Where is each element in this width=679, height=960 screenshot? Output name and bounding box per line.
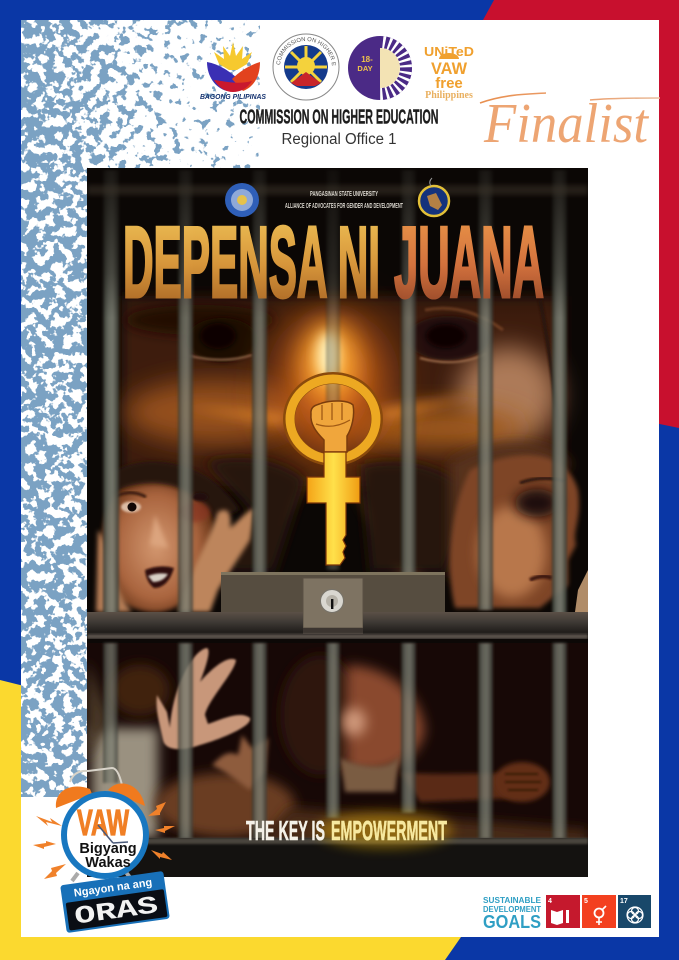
logo: United VAW free Philippines: Philippines	[425, 90, 473, 101]
SDG logos	[483, 895, 651, 932]
text: organisation names	[285, 191, 403, 208]
border: red corner	[483, 0, 679, 428]
speckled paint texture	[21, 20, 261, 800]
key: female symbol with fist	[289, 378, 377, 565]
central glow	[180, 315, 480, 590]
logo: university seal	[225, 183, 259, 217]
logo: Bagong Pilipinas: BAGONG PILIPINAS	[200, 92, 266, 101]
logo: United VAW free Philippines: free	[435, 75, 463, 92]
banner: Ngayon na ang ORAS	[60, 871, 170, 933]
lock block	[221, 572, 445, 628]
text: Sustainable Development Goals	[483, 895, 542, 932]
clock face: Wakas	[85, 855, 131, 871]
icon: SDG 17 partnerships	[618, 895, 651, 928]
left screaming face	[100, 461, 240, 612]
icon: SDG 5 gender equality	[582, 895, 616, 928]
clock face	[64, 794, 146, 881]
logo: CHED seal	[272, 34, 340, 100]
icon: SDG 4 quality education: 4	[548, 898, 552, 905]
logo: 18-day campaign	[348, 36, 412, 100]
bottom rail	[87, 838, 588, 877]
text: Sustainable Development Goals: DEVELOPMENT	[483, 904, 542, 914]
logo: gender and development seal	[419, 178, 449, 216]
clock face: Bigyang	[79, 841, 137, 857]
top dark rail	[87, 168, 588, 318]
label: Finalist: Finalist	[483, 93, 649, 155]
logo: United VAW free Philippines: UNiTeD	[424, 44, 474, 59]
vertical bars	[103, 170, 567, 620]
logo: United VAW free Philippines	[424, 44, 474, 101]
text: organisation names: ALLIANCE OF ADVOCATES FOR GENDER AND DEVELOPMENT	[285, 201, 403, 210]
alarm bolts	[33, 802, 175, 879]
poster title	[125, 224, 544, 300]
logo: 18-day campaign: DAY	[357, 64, 373, 73]
heading: Commission on Higher Education: COMMISSION ON HIGHER EDUCATION	[240, 106, 438, 128]
lower scene: crying girl and reaching hands	[87, 643, 588, 845]
logo: 18-day campaign: 18-	[361, 55, 373, 64]
tagline: The key is empowerment	[246, 812, 453, 848]
badge: VAW Bigyang Wakas alarm clock	[33, 768, 175, 933]
left face hands	[96, 509, 255, 612]
right profile face	[450, 455, 588, 612]
icon: SDG 4 quality education	[546, 895, 580, 928]
tagline: The key is empowerment: EMPOWERMENT	[331, 815, 447, 846]
poster organisations	[225, 178, 449, 217]
header logos	[200, 34, 474, 101]
icon: SDG 17 partnerships: 17	[620, 898, 628, 905]
logo: Bagong Pilipinas	[200, 42, 266, 101]
large face close-up	[122, 296, 562, 486]
banner: Ngayon na ang ORAS: Ngayon na ang	[73, 877, 153, 900]
tagline: The key is empowerment: THE KEY IS	[246, 815, 325, 846]
subheading: Regional Office 1: Regional Office 1	[282, 131, 396, 148]
text: organisation names: PANGASINAN STATE UNIVERSITY	[310, 189, 378, 198]
clock handle and bells	[56, 768, 145, 808]
logo: United VAW free Philippines: VAW	[431, 59, 468, 78]
clock face: VAW	[77, 802, 129, 843]
banner: Ngayon na ang ORAS: ORAS	[73, 891, 160, 932]
lower bars	[103, 643, 567, 843]
text: Sustainable Development Goals: GOALS	[483, 912, 541, 932]
icon: SDG 5 gender equality: 5	[584, 898, 588, 905]
poster: Depensa ni Juana	[87, 168, 588, 877]
border: yellow corner	[0, 680, 461, 960]
dark hair area	[205, 443, 572, 580]
text: Sustainable Development Goals: SUSTAINABLE	[483, 895, 541, 905]
middle rail	[87, 612, 588, 639]
